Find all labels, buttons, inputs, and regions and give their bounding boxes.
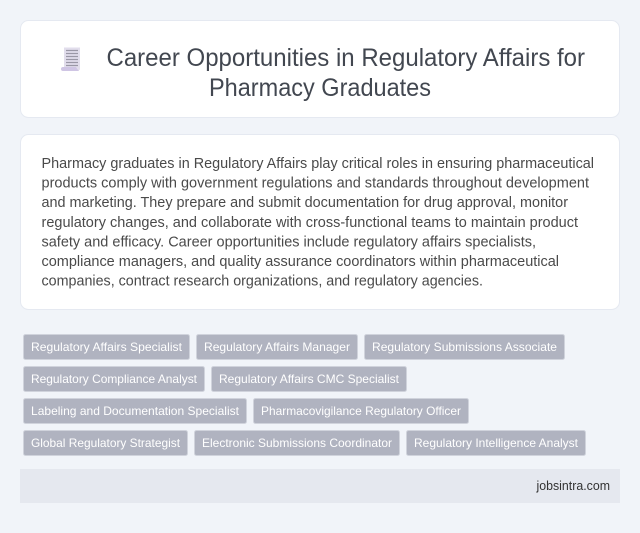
tag: Regulatory Intelligence Analyst	[414, 436, 579, 450]
tag: Regulatory Submissions Associate	[372, 340, 557, 354]
tag: Electronic Submissions Coordinator	[202, 436, 392, 450]
tag	[254, 398, 468, 424]
tag	[24, 366, 204, 392]
tag	[212, 366, 406, 392]
tag	[24, 334, 190, 360]
tag	[406, 430, 586, 456]
description text: Pharmacy graduates in Regulatory Affairs play critical roles in ensuring pharmaceutical	[42, 156, 594, 172]
tag: Labeling and Documentation Specialist	[31, 404, 240, 418]
panel: title card	[20, 20, 620, 118]
footer: jobsintra.com	[536, 479, 610, 493]
job role tags	[24, 334, 586, 456]
tag: Regulatory Affairs CMC Specialist	[219, 372, 400, 386]
footer	[20, 469, 620, 503]
description text: regulatory changes, and collaborate with cross-functional teams to maintain product	[42, 215, 578, 231]
description text	[42, 156, 594, 290]
title: Pharmacy Graduates	[209, 74, 431, 102]
tag: Regulatory Affairs Manager	[204, 340, 350, 354]
description text: compliance managers, and quality assurance coordinators within pharmaceutical	[42, 254, 559, 270]
tag: Global Regulatory Strategist	[31, 436, 181, 450]
description text: and marketing. They prepare and submit documentation for drug approval, monitor	[42, 195, 568, 211]
tag: Regulatory Affairs Specialist	[31, 340, 183, 354]
description text: products comply with government regulations and standards throughout development	[42, 176, 589, 192]
tag: Regulatory Compliance Analyst	[31, 372, 198, 386]
tag	[194, 430, 400, 456]
tag: Pharmacovigilance Regulatory Officer	[261, 404, 461, 418]
panel: description	[20, 134, 620, 310]
description text: safety and efficacy. Career opportunities include regulatory affairs specialists,	[42, 234, 536, 250]
icon: document scroll	[61, 48, 80, 71]
tag	[364, 334, 564, 360]
tag	[24, 398, 246, 424]
tag	[24, 430, 188, 456]
title: Career Opportunities in Regulatory Affairs for	[106, 44, 585, 72]
title	[106, 44, 585, 102]
tag	[196, 334, 358, 360]
description text: companies, contract research organizations, and regulatory agencies.	[42, 274, 483, 290]
